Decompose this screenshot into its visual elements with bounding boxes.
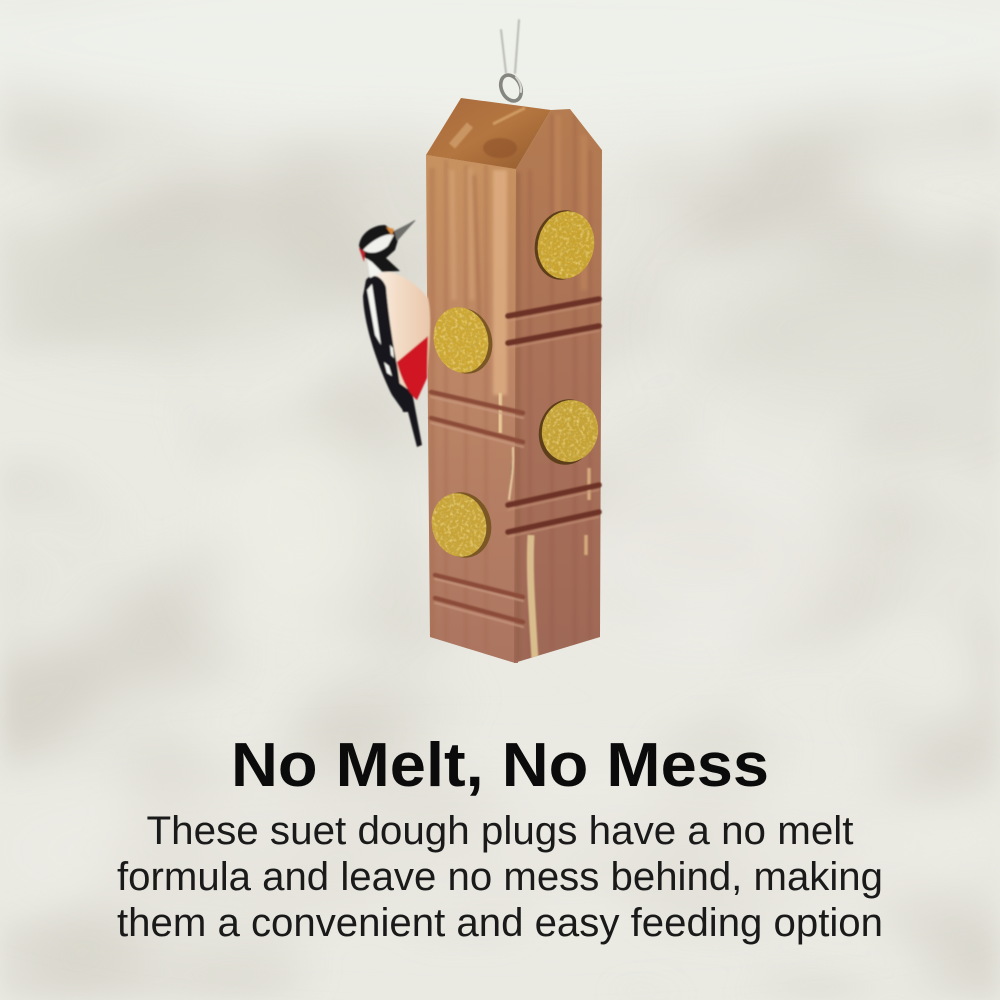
icon: great spotted woodpecker bbox=[359, 220, 430, 447]
bird wing white stripes bbox=[367, 284, 394, 376]
feeder right face bbox=[510, 100, 605, 670]
suet plug: upper right bbox=[528, 205, 600, 285]
suet plug: upper left bbox=[427, 301, 499, 380]
bird cheek bbox=[363, 234, 394, 253]
suet plug: lower left bbox=[425, 486, 498, 564]
bird tail bbox=[395, 380, 422, 447]
bird head bbox=[359, 220, 415, 272]
bird body bbox=[366, 271, 430, 395]
bird beak bbox=[394, 220, 416, 241]
suet plug: middle right bbox=[533, 394, 604, 470]
feeder: suet dough plugs bbox=[425, 205, 604, 564]
feeder roof bbox=[426, 98, 551, 169]
body text bbox=[117, 809, 883, 945]
heading: No Melt, No Mess bbox=[231, 731, 769, 800]
feeder grooves bbox=[431, 299, 599, 627]
feeder left face bbox=[426, 155, 518, 663]
bird black wing bbox=[363, 276, 404, 412]
body text: formula and leave no mess behind, making bbox=[117, 855, 883, 899]
bird red belly bbox=[397, 336, 428, 400]
bird red nape bbox=[359, 248, 365, 262]
feeder: cedar block bbox=[420, 98, 605, 670]
body text: them a convenient and easy feeding option bbox=[117, 901, 883, 945]
bird white neck bbox=[367, 258, 382, 278]
icon: hanging wire and ring bbox=[497, 20, 525, 104]
body text: These suet dough plugs have a no melt bbox=[146, 809, 854, 853]
bird orange forehead bbox=[386, 227, 394, 236]
